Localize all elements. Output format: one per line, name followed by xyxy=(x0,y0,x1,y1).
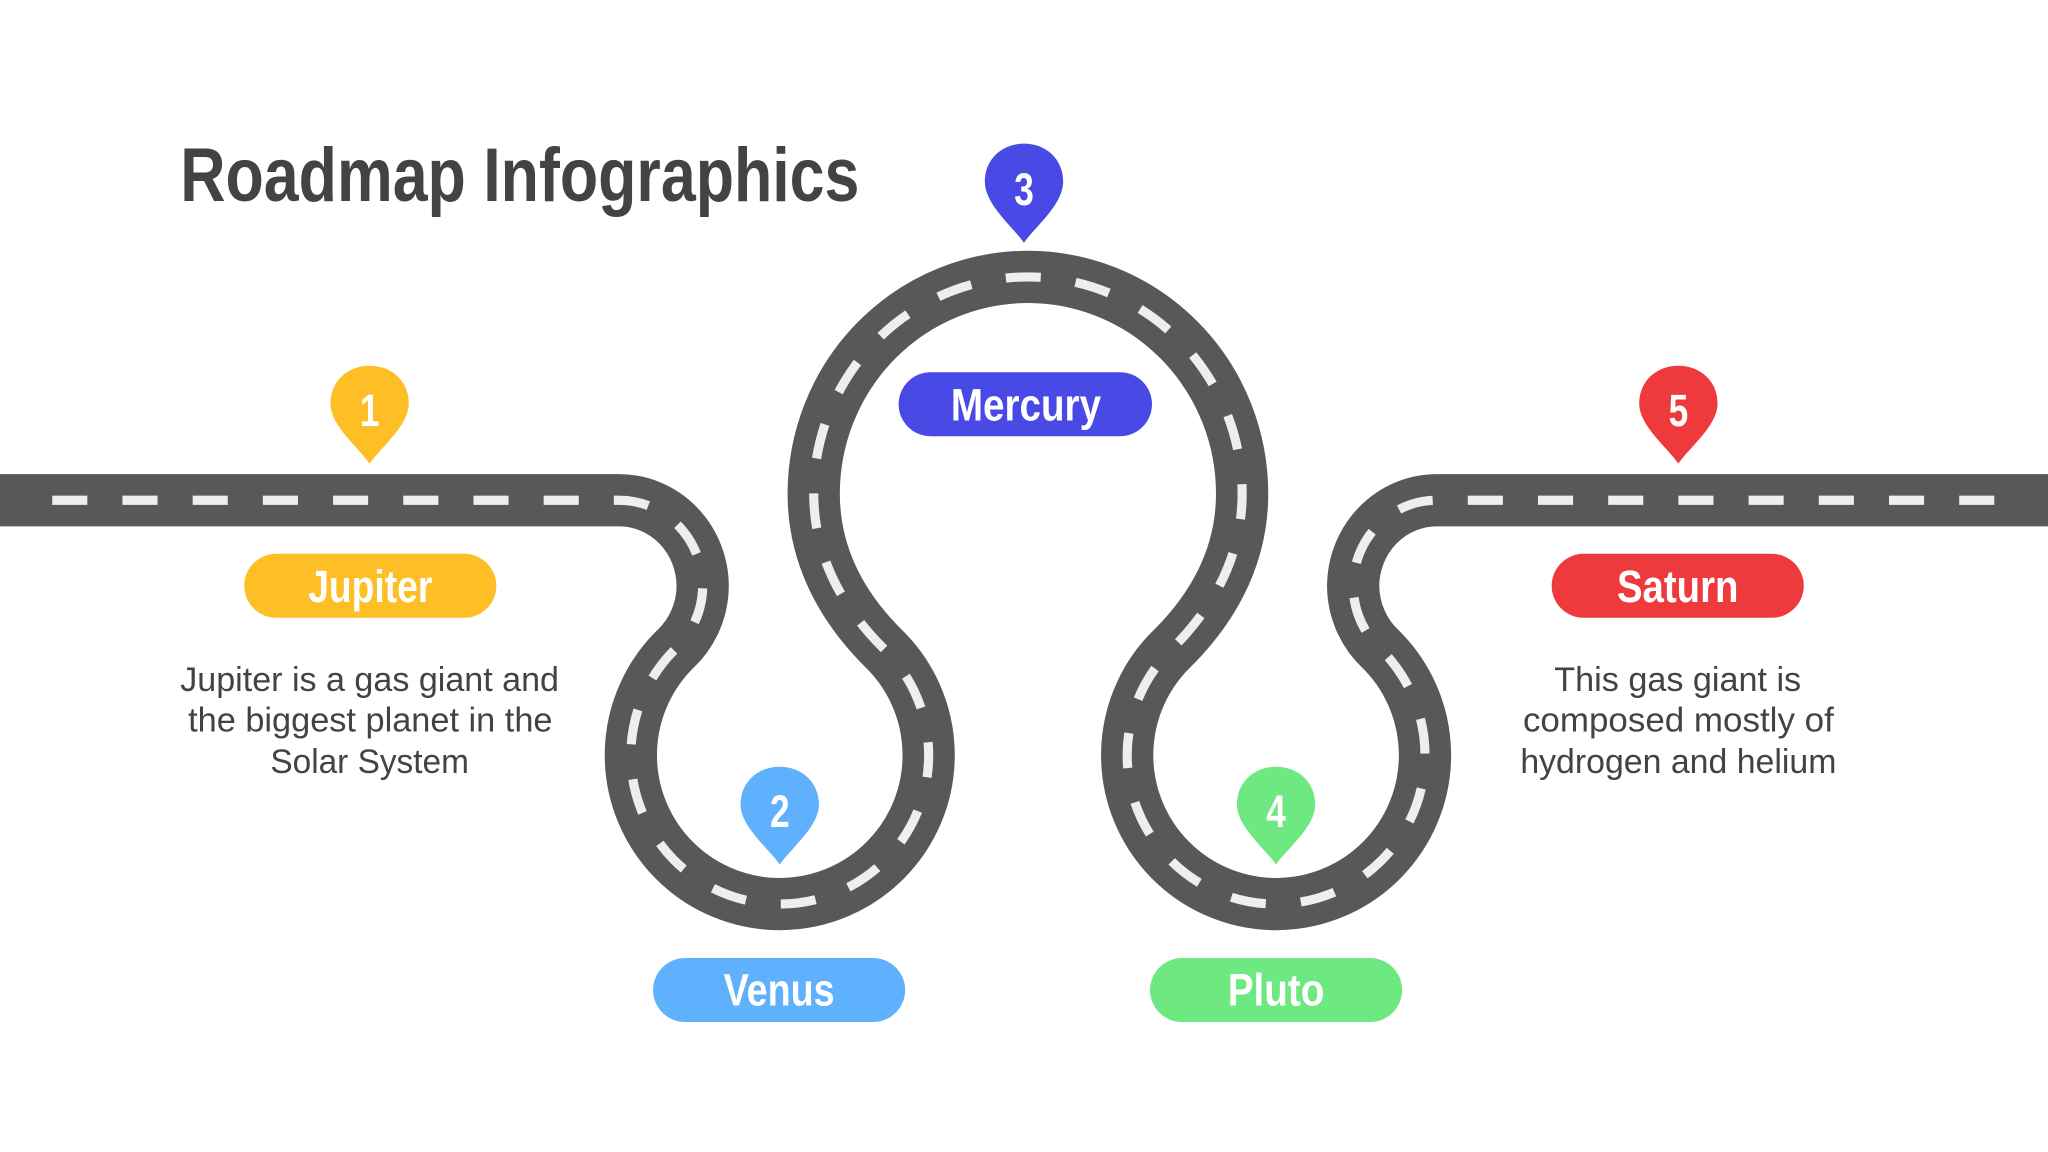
pin 2: 2 xyxy=(770,786,790,837)
pin 3 xyxy=(985,144,1063,243)
text: Jupiter description: Jupiter is a gas giant and xyxy=(180,661,559,699)
label: Saturn xyxy=(1552,554,1804,618)
text: Jupiter description xyxy=(180,661,559,781)
text: Jupiter description: the biggest planet in the xyxy=(188,701,552,739)
text: Jupiter description: Solar System xyxy=(270,743,469,781)
text: Saturn description: composed mostly of xyxy=(1523,701,1834,739)
text: Saturn description: This gas giant is xyxy=(1554,661,1801,699)
text: Saturn description: hydrogen and helium xyxy=(1520,743,1836,781)
pin 5 xyxy=(1639,366,1718,464)
label: Saturn: Saturn xyxy=(1617,561,1738,612)
label: Jupiter xyxy=(244,554,496,618)
road xyxy=(0,277,2048,904)
pin 5: 5 xyxy=(1669,385,1688,436)
pin 4 xyxy=(1237,767,1315,865)
label: Mercury: Mercury xyxy=(951,380,1102,431)
label: Mercury xyxy=(899,372,1152,436)
pin 3: 3 xyxy=(1014,164,1034,215)
label: Venus: Venus xyxy=(724,965,835,1016)
label: Pluto: Pluto xyxy=(1228,965,1324,1016)
pin 2 xyxy=(741,767,819,865)
label: Pluto xyxy=(1150,958,1402,1022)
pin 1: 1 xyxy=(360,385,379,436)
pin 4: 4 xyxy=(1266,786,1286,837)
label: Jupiter: Jupiter xyxy=(308,561,432,612)
title: Roadmap Infographics xyxy=(180,133,859,218)
text: Saturn description xyxy=(1520,661,1836,781)
label: Venus xyxy=(653,958,905,1022)
pin 1 xyxy=(330,366,409,464)
